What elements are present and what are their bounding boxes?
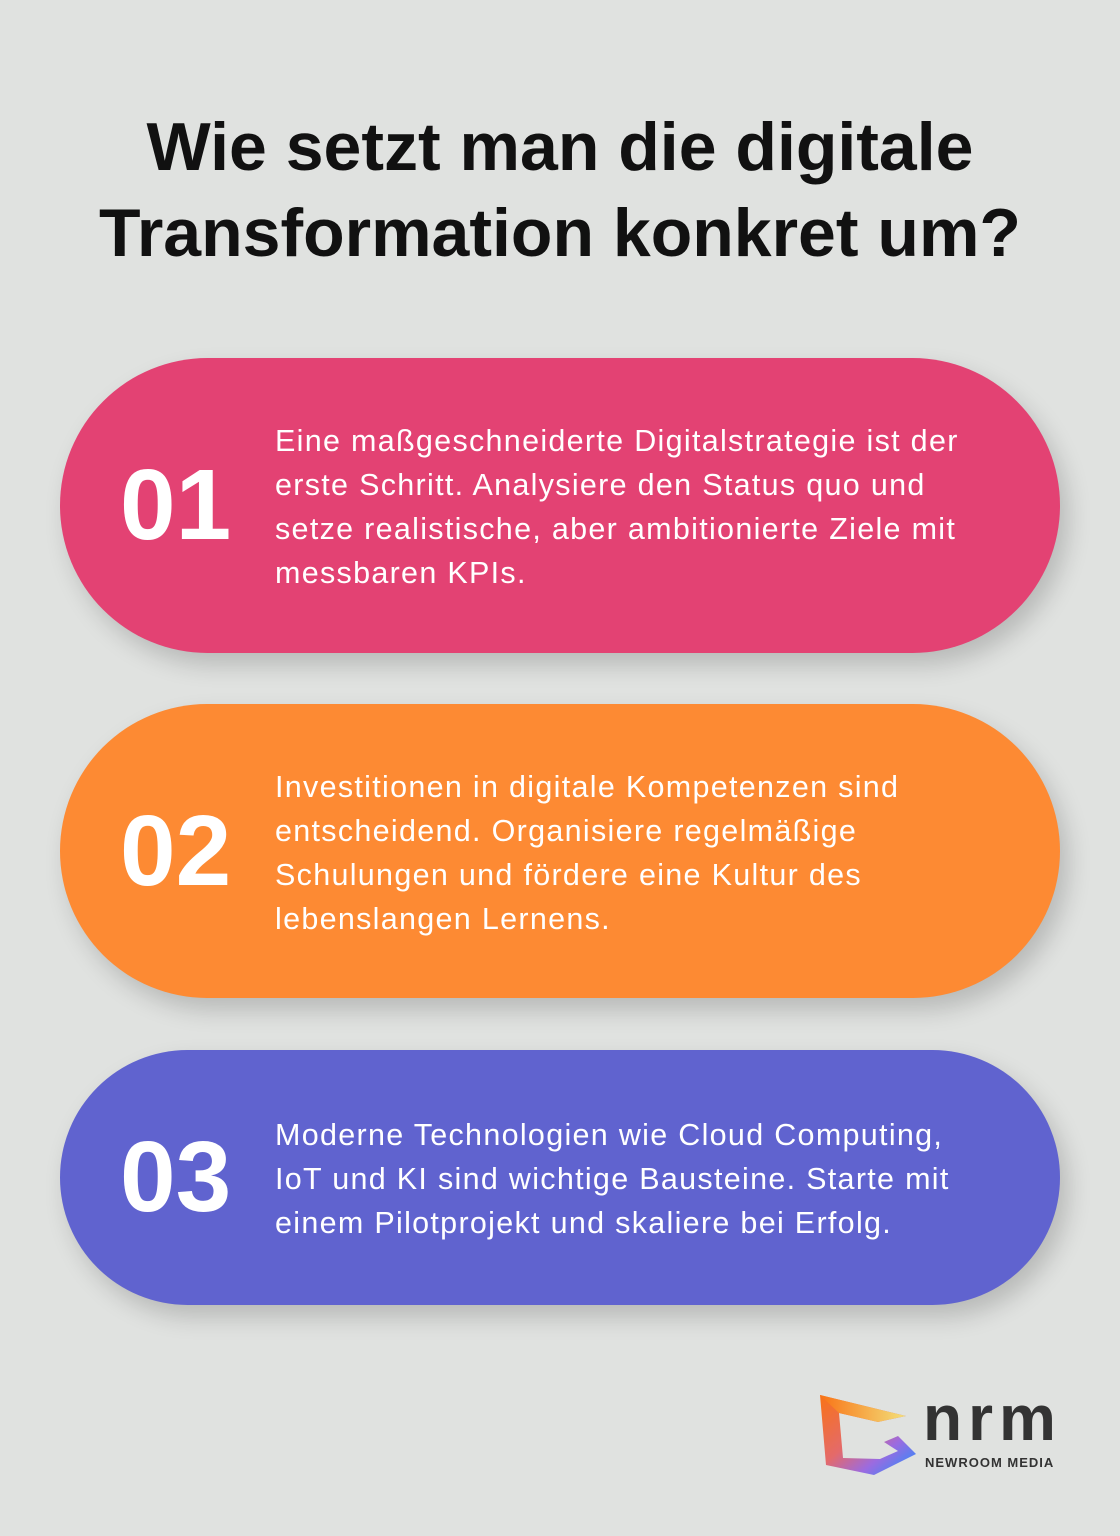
panel: step 01: [60, 358, 1060, 653]
number 02: 02: [120, 795, 231, 907]
title: Transformation konkret um?: [99, 195, 1021, 271]
icon: logo mark: [820, 1395, 916, 1475]
text 03: [275, 1118, 950, 1240]
text 01: messbaren KPIs.: [275, 556, 527, 590]
logo subtitle: NEWROOM MEDIA: [925, 1455, 1054, 1470]
text 02: [275, 770, 899, 936]
panel: step 03: [60, 1050, 1060, 1305]
text 03: IoT und KI sind wichtige Bausteine. Starte mit: [275, 1162, 950, 1196]
number 03: 03: [120, 1121, 231, 1233]
panel: step 02: [60, 704, 1060, 998]
text 01: setze realistische, aber ambitionierte Ziele mit: [275, 512, 956, 546]
text 01: [275, 424, 959, 590]
text 02: Investitionen in digitale Kompetenzen sind: [275, 770, 899, 804]
logo: [820, 1382, 1062, 1475]
text 03: Moderne Technologien wie Cloud Computing,: [275, 1118, 943, 1152]
title: [99, 109, 1021, 271]
text 02: lebenslangen Lernens.: [275, 902, 611, 936]
text 01: Eine maßgeschneiderte Digitalstrategie ist der: [275, 424, 959, 458]
text 01: erste Schritt. Analysiere den Status quo und: [275, 468, 926, 502]
title: Wie setzt man die digitale: [147, 109, 973, 185]
text 02: Schulungen und fördere eine Kultur des: [275, 858, 862, 892]
logo wordmark: nrm: [923, 1382, 1062, 1454]
text 03: einem Pilotprojekt und skaliere bei Erfolg.: [275, 1206, 892, 1240]
text 02: entscheidend. Organisiere regelmäßige: [275, 814, 857, 848]
number 01: 01: [120, 449, 231, 561]
